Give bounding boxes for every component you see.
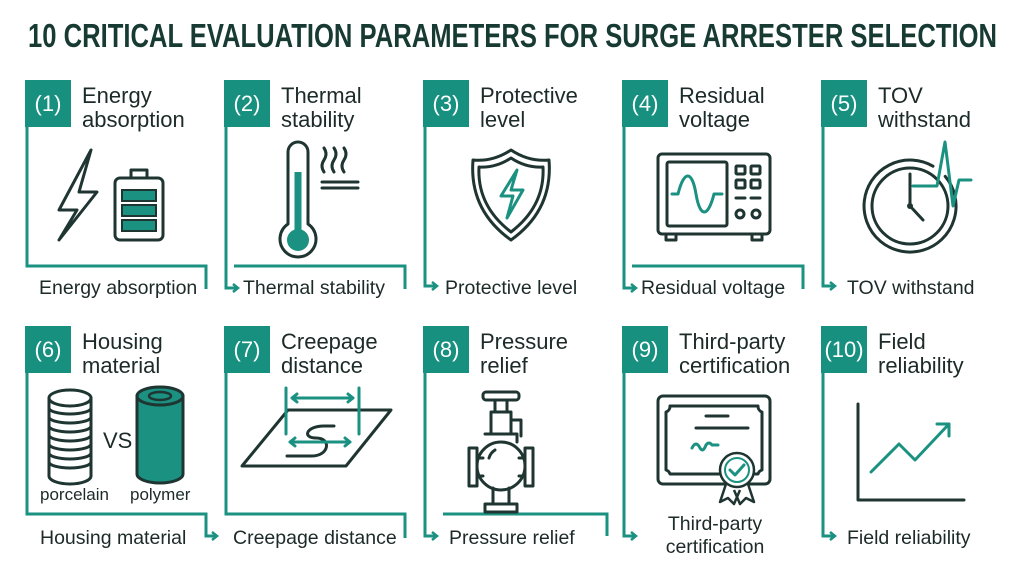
panel: 5 TOV withstand: (5) [831, 91, 857, 116]
icon: porcelain vs polymer: porcelain [40, 485, 109, 504]
panel: 7 creepage distance: Creepage [281, 329, 378, 354]
panel: 2 thermal stability: stability [281, 107, 354, 132]
panel: 4 residual voltage: Residual voltage [641, 277, 785, 299]
panel: 7 creepage distance: Creepage distance [233, 527, 397, 549]
panel: 8 pressure relief: Pressure relief [449, 527, 575, 549]
panel: 5 TOV withstand: TOV withstand [847, 277, 975, 299]
panel: 9 third-party certification: certification [679, 353, 790, 378]
panel: 6 housing material: material [82, 353, 160, 378]
panel: 2 thermal stability [224, 80, 405, 299]
panel: 1 energy absorption: Energy [82, 83, 152, 108]
panel: 1 energy absorption [25, 80, 206, 299]
panel: 7 creepage distance [224, 326, 405, 549]
panel: 5 TOV withstand [821, 80, 975, 299]
icon: porcelain vs polymer: VS [103, 428, 132, 453]
panel: 3 protective level: (3) [433, 91, 459, 116]
panel: 9 third-party certification [622, 326, 790, 558]
panel: 6 housing material [25, 326, 217, 549]
panel: 8 pressure relief [423, 326, 607, 549]
icon: rising chart [858, 404, 964, 500]
icon: valve [469, 392, 533, 512]
icon: lightning and battery [59, 150, 163, 240]
panel: 5 TOV withstand: TOV [878, 83, 923, 108]
panel: 10 field reliability: reliability [878, 353, 964, 378]
panel: 4 residual voltage: (4) [632, 91, 658, 116]
panel: 2 thermal stability: Thermal [281, 83, 362, 108]
panel: 3 protective level: level [480, 107, 525, 132]
icon: porcelain vs polymer: polymer [130, 485, 191, 504]
panel: 9 third-party certification: Third-party [679, 329, 785, 354]
panel: 4 residual voltage: Residual [679, 83, 765, 108]
panel: 1 energy absorption: (1) [35, 91, 61, 116]
panel: 1 energy absorption: absorption [82, 107, 185, 132]
icon: thermometer [280, 142, 358, 257]
icon: certificate [658, 396, 770, 504]
panel: 10 field reliability [821, 326, 971, 549]
panel: 3 protective level [423, 80, 578, 299]
panel: 5 TOV withstand: withstand [877, 107, 971, 132]
panel: 9 third-party certification: (9) [632, 337, 658, 362]
panel: 6 housing material: Housing material [40, 527, 186, 549]
panel: 8 pressure relief: Pressure [480, 329, 568, 354]
icon: creepage surface [242, 388, 391, 466]
panel: 1 energy absorption: Energy absorption [39, 277, 197, 299]
panel: 6 housing material: (6) [35, 337, 61, 362]
panel: 9 third-party certification: Third-party [668, 513, 762, 535]
panel: 10 field reliability: Field [878, 329, 926, 354]
panel: 10 field reliability: Field reliability [847, 527, 971, 549]
panel: 8 pressure relief: relief [480, 353, 529, 378]
panel: 9 third-party certification: certification [666, 536, 764, 558]
panel: 6 housing material: Housing [82, 329, 163, 354]
icon: oscilloscope [658, 154, 770, 240]
icon: porcelain vs polymer [40, 387, 191, 504]
panel: 2 thermal stability: (2) [234, 91, 260, 116]
panel: 7 creepage distance: (7) [234, 337, 260, 362]
icon: shield [473, 150, 549, 240]
panel: 3 protective level: Protective [480, 83, 578, 108]
panel: 10 field reliability: (10) [824, 337, 864, 362]
icon: clock with pulse [864, 142, 971, 252]
panel: 4 residual voltage: voltage [679, 107, 750, 132]
panel: 7 creepage distance: distance [281, 353, 363, 378]
panel: 3 protective level: Protective level [445, 277, 577, 299]
panel: 8 pressure relief: (8) [433, 337, 459, 362]
panel: 4 residual voltage [622, 80, 803, 299]
panel: 2 thermal stability: Thermal stability [243, 277, 385, 299]
